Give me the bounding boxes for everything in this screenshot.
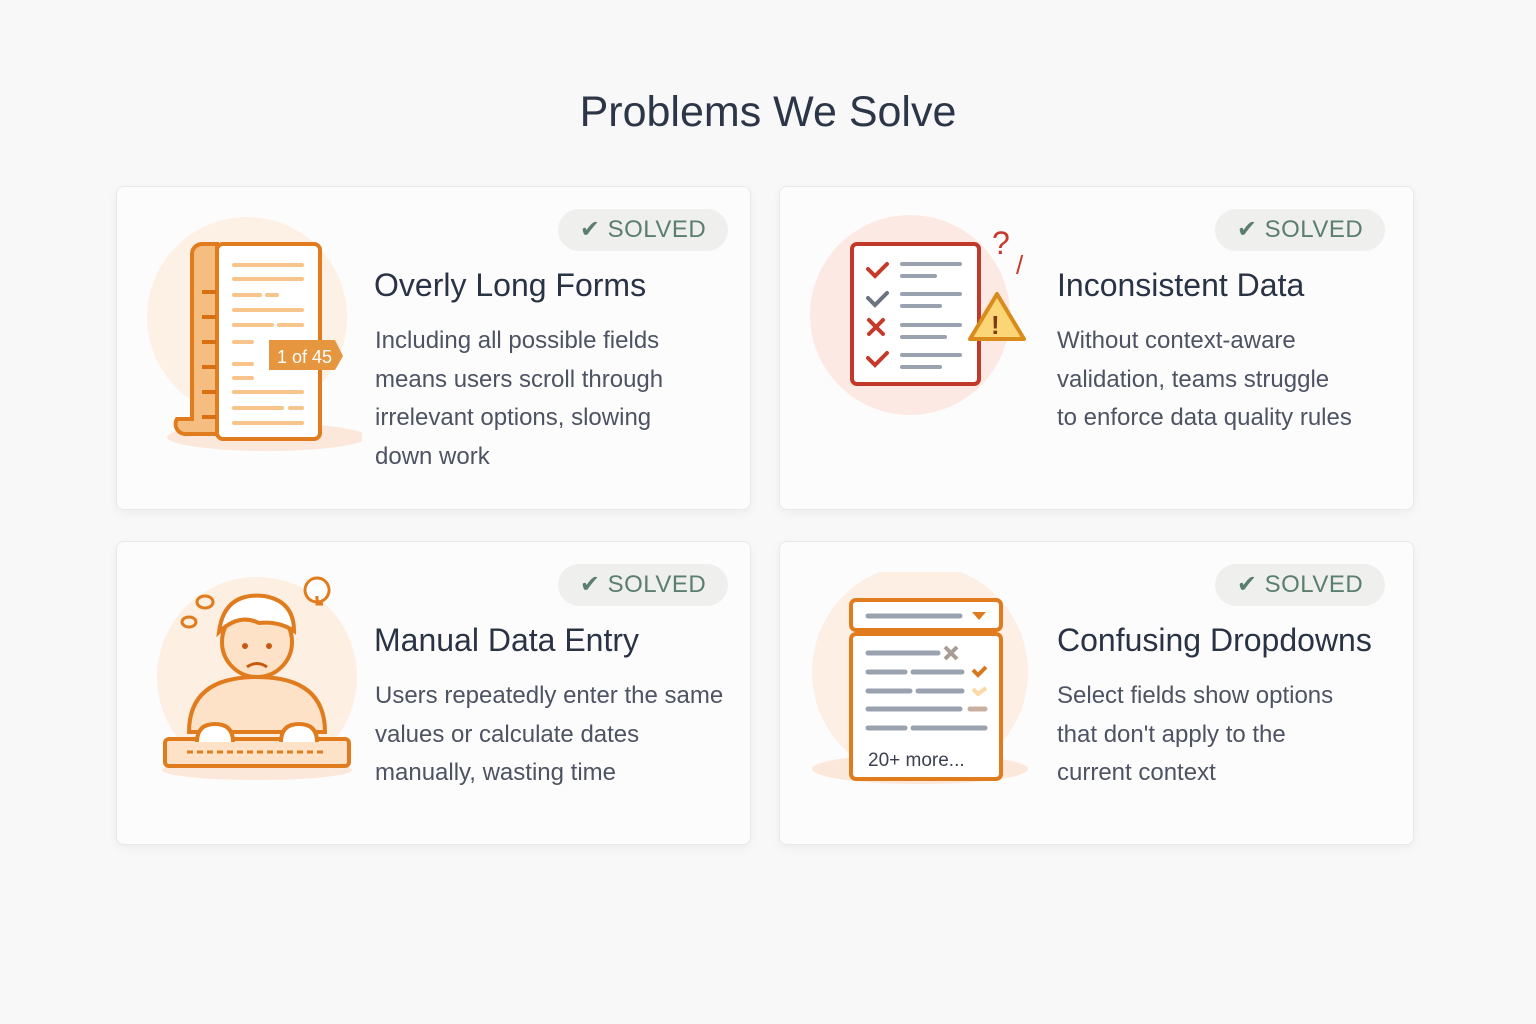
- icon: dropdown list: [812, 572, 1028, 784]
- text block: down work: [375, 442, 490, 470]
- badge: solved: [558, 564, 728, 606]
- text block: [375, 682, 723, 786]
- panel: manual data entry: [116, 541, 751, 845]
- badge: solved: [558, 209, 728, 251]
- text block: that don't apply to the: [1057, 720, 1286, 748]
- panel: confusing dropdowns: [779, 541, 1414, 845]
- text block: [1057, 682, 1333, 786]
- icon: long scroll form: [147, 217, 362, 451]
- text block: irrelevant options, slowing: [375, 404, 651, 431]
- badge: solved: ✔ SOLVED: [580, 216, 706, 243]
- title: Problems We Solve: [580, 88, 956, 136]
- panel: overly long forms: [116, 186, 751, 510]
- text block: current context: [1057, 759, 1216, 786]
- text block: Users repeatedly enter the same: [375, 682, 723, 709]
- icon: dropdown list: 20+ more...: [868, 750, 965, 771]
- badge: solved: ✔ SOLVED: [1237, 216, 1363, 243]
- badge: solved: ✔ SOLVED: [580, 571, 706, 598]
- text block: validation, teams struggle: [1057, 366, 1329, 392]
- icon: checklist with warning: ?: [992, 225, 1010, 261]
- text block: Including all possible fields: [375, 327, 659, 354]
- text block: Without context-aware: [1057, 327, 1296, 354]
- text block: [375, 327, 663, 470]
- text block: manually, wasting time: [375, 759, 616, 786]
- heading: Inconsistent Data: [1057, 267, 1304, 303]
- badge: solved: ✔ SOLVED: [1237, 571, 1363, 598]
- heading: Manual Data Entry: [374, 622, 639, 658]
- badge: solved: [1215, 209, 1385, 251]
- text block: [1057, 327, 1352, 431]
- icon: checklist with warning: /: [1016, 250, 1024, 280]
- icon: checklist with warning: !: [991, 310, 1000, 340]
- badge: solved: [1215, 564, 1385, 606]
- icon: stressed person typing: [157, 576, 357, 780]
- heading: Overly Long Forms: [374, 267, 646, 303]
- text block: values or calculate dates: [375, 720, 639, 748]
- text block: Select fields show options: [1057, 682, 1333, 709]
- icon: checklist with warning: [810, 215, 1026, 415]
- text block: to enforce data quality rules: [1057, 404, 1352, 431]
- heading: Confusing Dropdowns: [1057, 622, 1372, 658]
- icon: long scroll form: 1 of 45: [277, 347, 332, 367]
- panel: inconsistent data: [779, 186, 1414, 510]
- text block: means users scroll through: [375, 366, 663, 392]
